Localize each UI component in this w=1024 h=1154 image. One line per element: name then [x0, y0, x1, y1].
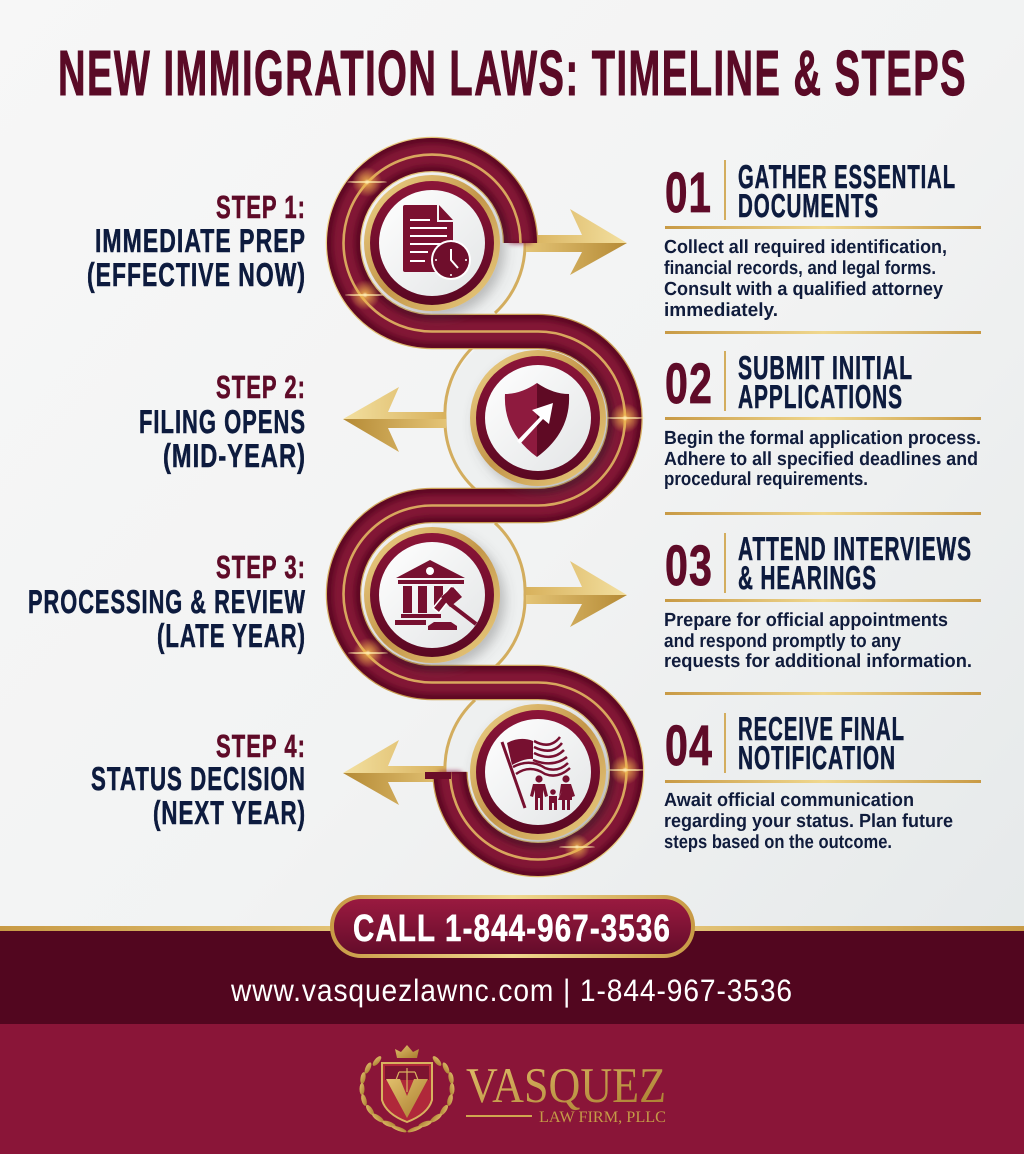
step 2 label: [139, 369, 306, 474]
step 3 label: (LATE YEAR): [157, 617, 306, 654]
step 04 description: steps based on the outcome.: [664, 832, 892, 853]
icon: flag and family: [502, 737, 575, 810]
step 03 description: Prepare for official appointments: [664, 610, 948, 631]
shield: [382, 1063, 432, 1122]
sparkles: [345, 167, 645, 860]
medallion 1: document and clock: [364, 175, 500, 311]
icon: gavel: [428, 586, 476, 630]
call button: CALL 1-844-967-3536: [353, 908, 671, 950]
step 01 description: [664, 237, 947, 321]
step 04: [664, 710, 981, 853]
medallion 3: courthouse and gavel: [364, 527, 500, 663]
step 03: & HEARINGS: [738, 559, 877, 596]
step 03: [664, 530, 981, 695]
logo wordmark: LAW FIRM, PLLC: [539, 1109, 666, 1126]
ribbon end tab: [425, 772, 451, 779]
step 2 label: STEP 2:: [216, 369, 306, 405]
icon: courthouse: [395, 560, 476, 630]
step 04 description: [664, 790, 953, 853]
step 02 description: [664, 428, 981, 490]
icon: document with clock: [403, 205, 471, 280]
step 03 description: [664, 610, 972, 672]
step 01 description: Consult with a qualified attorney: [664, 279, 943, 300]
step 1 label: IMMEDIATE PREP: [95, 222, 306, 259]
step 01 description: financial records, and legal forms.: [664, 258, 936, 279]
step 1 label: STEP 1:: [216, 189, 306, 225]
step 01: 01: [665, 161, 712, 225]
arrow 4: [343, 740, 446, 805]
step 01: DOCUMENTS: [738, 187, 879, 224]
laurel: [359, 1055, 455, 1134]
crown: [395, 1045, 419, 1058]
footer logo band: [0, 1024, 1024, 1154]
call button: [330, 895, 695, 958]
step 02: [664, 349, 981, 515]
panel: numbered steps: [664, 158, 981, 853]
arrow 1: [526, 209, 627, 275]
step 04 description: Await official communication: [664, 790, 914, 811]
step 03 description: and respond promptly to any: [664, 631, 901, 652]
panel: left step labels: [28, 189, 306, 831]
step 01 description: Collect all required identification,: [664, 237, 947, 258]
step 02: 02: [665, 352, 713, 416]
step 02: SUBMIT INITIAL: [738, 349, 913, 386]
step 04: RECEIVE FINAL: [738, 710, 905, 747]
logo wordmark: VASQUEZ: [466, 1057, 666, 1113]
step 3 label: STEP 3:: [216, 549, 306, 585]
step 1 label: [87, 189, 306, 293]
step 02 description: Adhere to all specified deadlines and: [664, 449, 978, 470]
step 03 description: requests for additional information.: [664, 651, 972, 672]
timeline: serpentine ribbon with medallions and arrows: [343, 155, 645, 860]
step 03: 03: [665, 534, 713, 598]
step 01 description: immediately.: [664, 300, 778, 321]
step 3 label: [28, 549, 306, 654]
step 04: NOTIFICATION: [738, 739, 896, 776]
step 2 label: (MID-YEAR): [163, 437, 306, 474]
step 02 description: Begin the formal application process.: [664, 428, 981, 449]
step 4 label: STATUS DECISION: [91, 760, 306, 797]
medallion 4: flag and family: [470, 704, 606, 840]
step 02: APPLICATIONS: [738, 378, 903, 415]
step 02 description: procedural requirements.: [664, 469, 868, 490]
arrow 2: [343, 387, 446, 452]
step 4 label: [91, 728, 306, 831]
contact line: www.vasquezlawnc.com | 1-844-967-3536: [230, 973, 793, 1008]
arrow 3: [526, 561, 627, 627]
step 2 label: FILING OPENS: [139, 403, 306, 440]
step 04 description: regarding your status. Plan future: [664, 811, 953, 832]
step 04: 04: [665, 714, 713, 778]
logo crest: [359, 1045, 455, 1134]
connector arcs: [432, 243, 538, 772]
footer contact band: [0, 926, 1024, 1024]
icon: shield with arrow: [505, 383, 569, 457]
step 4 label: STEP 4:: [216, 728, 306, 764]
step 4 label: (NEXT YEAR): [153, 794, 306, 831]
step 01: [664, 158, 981, 334]
medallion 2: shield: [470, 350, 606, 486]
step 1 label: (EFFECTIVE NOW): [87, 256, 306, 293]
step 3 label: PROCESSING & REVIEW: [28, 583, 306, 620]
serpentine ribbon: [344, 155, 626, 860]
